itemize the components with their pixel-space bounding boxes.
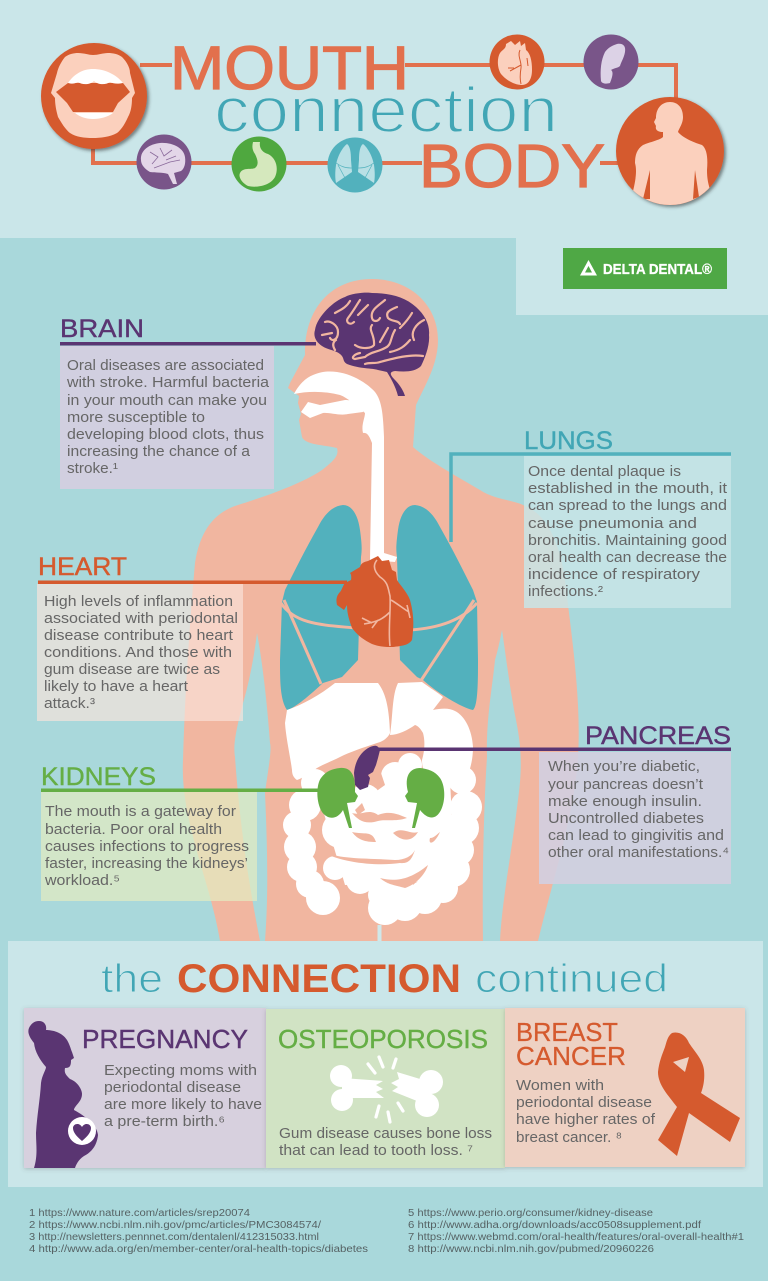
heading: the connection continued: continued — [475, 957, 668, 1001]
text: heart: likely to have a heart — [44, 679, 188, 695]
text: heart: gum disease are twice as — [44, 662, 220, 678]
logo: Delta Dental: DELTA DENTAL® — [603, 261, 712, 278]
text: kidneys: bacteria. Poor oral health — [45, 822, 222, 838]
footnotes left: 3 http://newsletters.pennnet.com/dentalenl/412315033.html — [29, 1232, 319, 1243]
text: heart: High levels of inflammation — [44, 594, 233, 610]
footnotes left: 4 http://www.ada.org/en/member-center/oral-health-topics/diabetes — [29, 1244, 368, 1255]
text: lungs: bronchitis. Maintaining good — [528, 533, 727, 549]
header background — [0, 0, 768, 238]
title: MOUTH: MOUTH — [170, 34, 409, 102]
text: brain: in your mouth can make you — [67, 393, 267, 409]
text: heart: conditions. And those with — [44, 645, 232, 661]
title: BODY: BODY — [419, 132, 605, 200]
text: kidneys: The mouth is a gateway for — [45, 804, 236, 820]
text: pregnancy — [104, 1063, 262, 1130]
heading: PANCREAS: PANCREAS — [585, 722, 731, 750]
heading: BRAIN: BRAIN — [60, 315, 144, 343]
heading: LUNGS: LUNGS — [524, 427, 613, 455]
text: heart: associated with periodontal — [44, 611, 238, 627]
icon: body circle — [616, 97, 724, 215]
panel: brain — [60, 315, 316, 489]
heading: OSTEOPOROSIS: OSTEOPOROSIS — [278, 1024, 488, 1054]
heading: KIDNEYS: KIDNEYS — [41, 763, 156, 791]
panel: kidneys — [41, 763, 321, 901]
text: lungs: cause pneumonia and — [528, 516, 697, 532]
text: breast cancer: periodontal disease — [516, 1095, 652, 1111]
text: pancreas: other oral manifestations.⁴ — [548, 845, 729, 861]
text: heart: disease contribute to heart — [44, 628, 233, 644]
footnotes right: 5 https://www.perio.org/consumer/kidney-disease — [408, 1208, 653, 1219]
heading: HEART: HEART — [38, 553, 127, 581]
text: pancreas: Uncontrolled diabetes — [548, 811, 704, 827]
pancreas — [354, 746, 380, 790]
text: breast cancer — [516, 1078, 656, 1146]
text: pregnancy: are more likely to have — [104, 1097, 262, 1113]
icon: lungs circle — [328, 138, 382, 192]
text: kidneys: faster, increasing the kidneys’ — [45, 856, 248, 872]
card: breast cancer — [505, 1008, 745, 1167]
text: lungs: oral health can decrease the — [528, 550, 727, 566]
text: brain: with stroke. Harmful bacteria — [66, 375, 270, 391]
airway — [294, 371, 397, 562]
heading: BREAST CANCER: CANCER — [516, 1041, 626, 1071]
arm gaps — [234, 630, 521, 941]
text: lungs — [528, 464, 727, 600]
header connector lines — [93, 65, 676, 163]
intestines — [283, 753, 482, 925]
text: heart: attack.³ — [44, 696, 95, 712]
heading: the connection continued — [101, 957, 668, 1001]
heading: PREGNANCY: PREGNANCY — [82, 1024, 248, 1054]
card: pregnancy — [24, 1008, 266, 1168]
title: connection: connection — [214, 74, 558, 146]
footnotes right: 7 https://www.webmd.com/oral-health/features/oral-overall-health#1 — [408, 1232, 744, 1243]
text: pancreas: When you’re diabetic, — [548, 759, 700, 775]
text: brain: more susceptible to — [67, 410, 205, 426]
brain — [314, 293, 429, 396]
heading: the connection continued: the — [101, 957, 163, 1001]
icon: pregnant woman — [28, 1021, 98, 1168]
text: kidneys — [44, 804, 249, 889]
stomach and colon — [390, 682, 473, 790]
text: lungs: incidence of respiratory — [528, 567, 701, 583]
logo panel background — [516, 238, 768, 315]
text: pancreas — [548, 759, 729, 861]
logo: Delta Dental — [563, 248, 727, 289]
text: brain: stroke.¹ — [67, 461, 118, 477]
icon: heart circle — [490, 34, 544, 90]
text: breast cancer: breast cancer. ⁸ — [516, 1130, 622, 1146]
text: lungs: Once dental plaque is — [528, 464, 681, 480]
heart — [336, 556, 413, 647]
card: osteoporosis — [266, 1009, 505, 1168]
leg gap — [378, 925, 382, 941]
text: pregnancy: periodontal disease — [104, 1080, 241, 1096]
text: breast cancer: have higher rates of — [516, 1112, 656, 1128]
lungs — [280, 505, 478, 710]
footnotes right: 8 http://www.ncbi.nlm.nih.gov/pubmed/20960226 — [408, 1244, 654, 1255]
icon: organ circle — [584, 34, 638, 90]
footnotes right — [408, 1208, 744, 1255]
panel: the connection continued — [8, 941, 763, 1187]
text: osteoporosis: Gum disease causes bone loss — [279, 1126, 492, 1142]
text: pancreas: make enough insulin. — [548, 794, 702, 810]
kidneys — [317, 768, 444, 828]
text: lungs: infections.² — [528, 584, 603, 600]
icon: ribbon — [658, 1033, 740, 1156]
text: osteoporosis: that can lead to tooth loss. ⁷ — [279, 1143, 473, 1159]
text: pancreas: your pancreas doesn’t — [548, 777, 703, 793]
footnotes left — [29, 1208, 368, 1255]
liver — [285, 683, 390, 780]
heading: the connection continued: CONNECTION — [177, 957, 461, 1001]
intestine gaps — [332, 774, 440, 888]
footnotes left: 2 https://www.ncbi.nlm.nih.gov/pmc/articles/PMC3084574/ — [29, 1220, 321, 1231]
icon: broken bone — [330, 1057, 443, 1122]
text: kidneys: workload.⁵ — [44, 873, 120, 889]
text: pancreas: can lead to gingivitis and — [548, 828, 724, 844]
text: pregnancy: Expecting moms with — [104, 1063, 257, 1079]
panel: lungs — [451, 427, 731, 608]
footnotes left: 1 https://www.nature.com/articles/srep20074 — [29, 1208, 250, 1219]
text: lungs: established in the mouth, it — [528, 481, 727, 497]
heading: BREAST CANCER: BREAST — [516, 1017, 618, 1047]
text: pregnancy: a pre-term birth.⁶ — [104, 1114, 225, 1130]
icon: mouth — [41, 43, 147, 149]
text: heart — [44, 594, 238, 712]
text: osteoporosis — [279, 1126, 492, 1159]
icon: stomach circle — [232, 136, 286, 192]
panel: heart — [37, 553, 347, 721]
footnotes right: 6 http://www.adha.org/downloads/acc0508supplement.pdf — [408, 1220, 701, 1231]
text: brain: Oral diseases are associated — [67, 358, 264, 374]
text: breast cancer: Women with — [516, 1078, 604, 1094]
text: lungs: can spread to the lungs and — [528, 498, 727, 514]
icon: brain circle — [136, 134, 192, 190]
text: brain — [66, 358, 270, 477]
illustration: body — [183, 279, 579, 941]
text: brain: developing blood clots, thus — [67, 427, 264, 443]
heading: BREAST CANCER — [516, 1017, 626, 1071]
panel: pancreas — [378, 722, 731, 884]
body silhouette — [183, 279, 579, 941]
text: brain: increasing the chance of a — [67, 444, 251, 460]
text: kidneys: causes infections to progress — [45, 839, 249, 855]
